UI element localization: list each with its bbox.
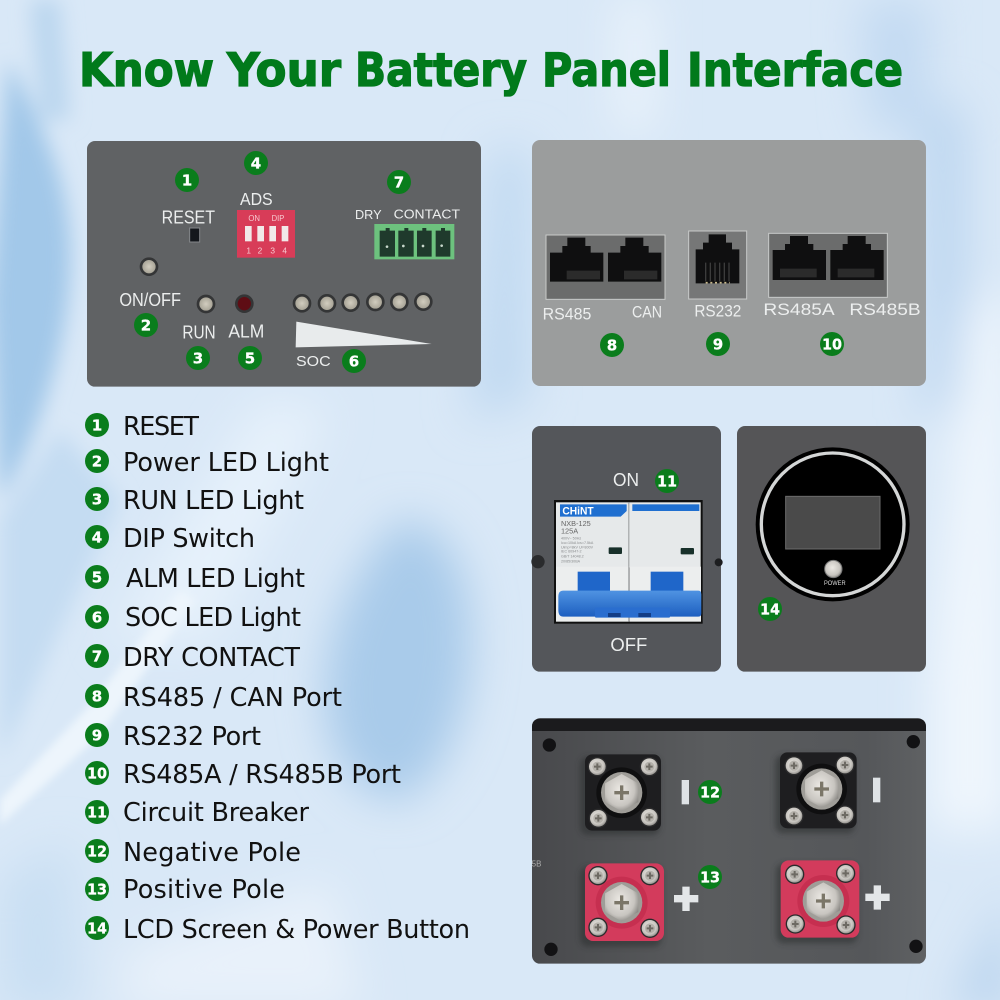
legend list: 6 — [92, 608, 102, 626]
panel number badges — [134, 151, 844, 889]
port labels — [543, 300, 921, 323]
breaker body: Icu=10kA Ics=7.5kA — [561, 541, 594, 545]
legend list: 13 — [87, 880, 107, 898]
reset label and button — [162, 206, 215, 242]
panel number badges: 2 — [141, 316, 151, 334]
breaker body: 20/85/30BA — [561, 559, 581, 563]
breaker body: CHiNT — [562, 505, 594, 517]
panel number badges: 6 — [349, 352, 359, 370]
title: Your — [226, 43, 341, 97]
panel number badges: 5 — [245, 350, 255, 368]
SOC triangle — [296, 322, 432, 370]
LED labels: ON/OFF — [119, 289, 181, 310]
DIP switch: 1 — [246, 245, 251, 255]
port labels: CAN — [632, 303, 662, 322]
panel: communication ports — [532, 140, 926, 386]
dry contact connector — [355, 207, 460, 259]
LED labels: ALM — [228, 321, 264, 342]
legend list: 14 — [87, 920, 107, 938]
panel number badges: 10 — [822, 336, 842, 354]
panel number badges: 7 — [394, 174, 404, 192]
title — [79, 43, 903, 97]
LED lights — [141, 259, 431, 312]
DIP switch: ON — [248, 213, 260, 223]
legend list: Negative Pole — [123, 838, 301, 868]
DIP switch: DIP — [272, 213, 285, 223]
panel: circuit breaker — [531, 426, 723, 672]
panel number badges: 4 — [251, 154, 261, 172]
breaker body: Uimp=8kV Ui=800V — [561, 545, 594, 549]
panel number badges: 12 — [700, 784, 720, 802]
corner screws — [543, 735, 923, 956]
panel: battery poles — [532, 718, 926, 964]
panel number badges: 9 — [713, 336, 723, 354]
dry contact connector: DRY — [355, 207, 382, 222]
LED labels — [119, 289, 264, 342]
legend list: 8 — [92, 688, 102, 706]
minus signs — [682, 778, 880, 804]
panel number badges: 13 — [700, 868, 720, 886]
panel number badges: 1 — [182, 172, 192, 190]
LED labels: RUN — [182, 321, 216, 342]
port labels: RS485B — [849, 300, 921, 319]
DIP switch: 2 — [258, 245, 263, 255]
legend list: RS232 Port — [123, 722, 261, 752]
legend list: RUN LED Light — [123, 486, 304, 516]
legend list: Power LED Light — [123, 448, 329, 478]
legend list: 4 — [92, 528, 102, 546]
RS232 jack — [689, 231, 747, 299]
DIP switch: 4 — [282, 245, 287, 255]
breaker body — [554, 500, 703, 624]
negative terminals — [585, 752, 857, 831]
panel: control panel — [87, 141, 481, 387]
legend list: RS485 / CAN Port — [123, 683, 342, 713]
ON OFF labels — [610, 469, 647, 655]
DIP switch — [237, 189, 295, 258]
title: Interface — [687, 43, 903, 97]
positive terminals — [585, 860, 859, 941]
legend list: RESET — [123, 412, 199, 442]
round display — [756, 447, 910, 601]
port labels: RS232 — [694, 302, 741, 321]
legend list: RS485A / RS485B Port — [123, 760, 401, 790]
breaker body: 400V~ 50Hz — [561, 537, 581, 541]
panel number badges: 3 — [193, 350, 203, 368]
title: Battery — [355, 43, 527, 97]
breaker body: GB/T 14048.2 — [561, 555, 584, 559]
legend list: 7 — [92, 648, 102, 666]
legend list: ALM LED Light — [126, 564, 305, 594]
port labels: RS485 — [543, 304, 591, 323]
legend list: 3 — [92, 490, 102, 508]
legend list — [85, 412, 470, 945]
legend list: 9 — [92, 726, 102, 744]
breaker mounting screws — [531, 555, 723, 568]
breaker body: 125A — [561, 526, 578, 535]
legend list: Circuit Breaker — [123, 798, 310, 828]
panel: LCD screen — [737, 426, 926, 672]
breaker body: NXB-125 — [561, 519, 591, 528]
title: Know — [79, 43, 214, 97]
dry contact connector: CONTACT — [394, 207, 460, 222]
panel number badges: 11 — [657, 472, 677, 490]
legend list: 10 — [87, 764, 107, 782]
panel number badges: 8 — [607, 336, 617, 354]
legend list: 12 — [87, 842, 107, 860]
plus signs — [674, 885, 890, 911]
terminal shadows — [580, 755, 858, 947]
ON OFF labels: OFF — [610, 634, 647, 655]
DIP switch: 3 — [270, 245, 275, 255]
legend list: SOC LED Light — [125, 603, 301, 633]
power button — [824, 560, 846, 587]
breaker body: IEC 60947-2 — [561, 550, 582, 554]
ON OFF labels: ON — [613, 469, 639, 490]
RS485 and CAN jacks — [546, 235, 665, 299]
legend list: 1 — [92, 416, 102, 434]
reset label and button: RESET — [162, 206, 215, 227]
legend list: 5 — [92, 568, 102, 586]
legend list: Positive Pole — [123, 875, 285, 905]
port labels: RS485A — [763, 300, 836, 319]
panel number badges: 14 — [760, 600, 780, 618]
panel: battery poles: 5B — [532, 860, 541, 869]
SOC triangle: SOC — [296, 354, 331, 370]
legend list: DRY CONTACT — [123, 643, 300, 673]
legend list: 2 — [92, 452, 102, 470]
legend list: LCD Screen & Power Button — [123, 915, 470, 945]
DIP switch: ADS — [240, 189, 273, 209]
legend list: 11 — [87, 804, 107, 822]
title: Panel — [542, 43, 671, 97]
legend list: DIP Switch — [123, 524, 255, 554]
power button: POWER — [824, 580, 846, 587]
RS485A and RS485B jacks — [769, 233, 887, 297]
